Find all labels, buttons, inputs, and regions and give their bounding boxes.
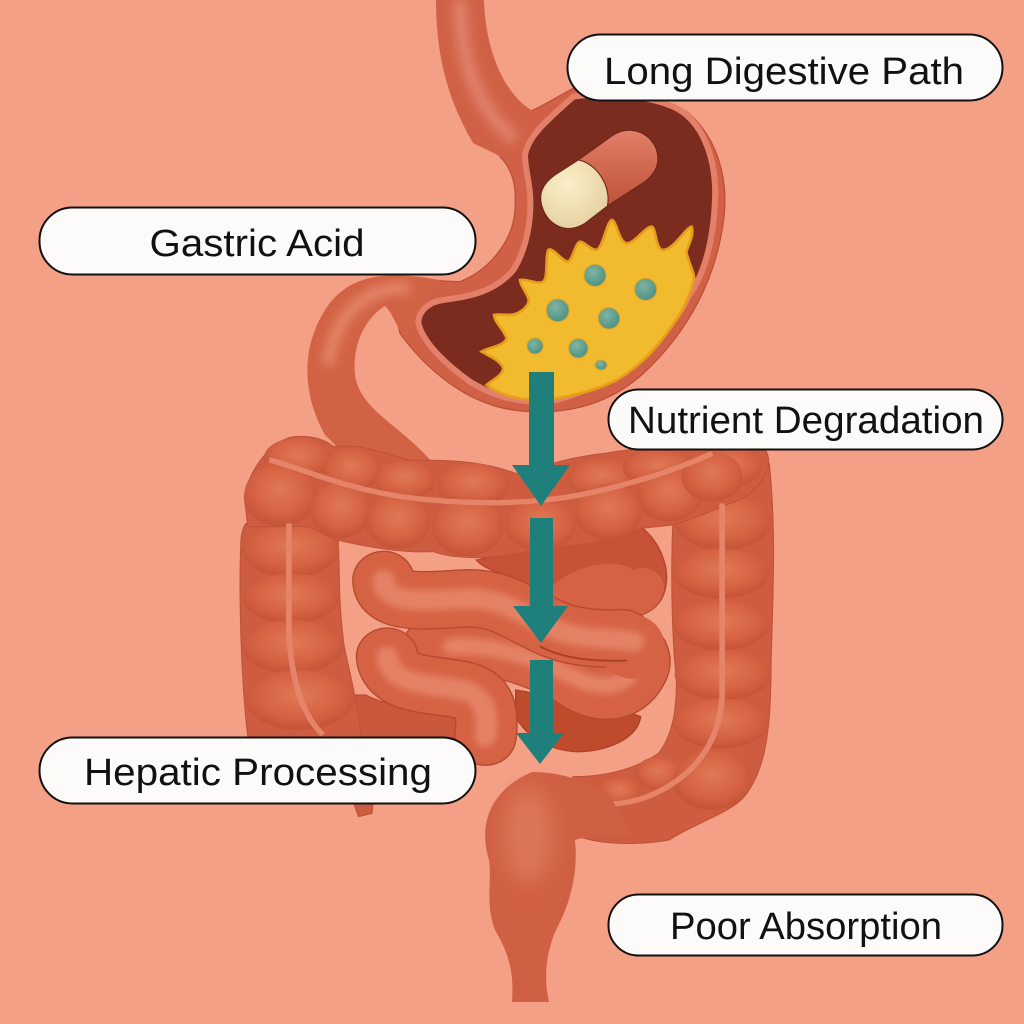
small intestine and colon [240,436,774,843]
label: Nutrient Degradation [608,390,1002,450]
ascending colon [240,523,373,817]
transverse colon [244,436,769,558]
esophagus [436,0,535,170]
label: Gastric Acid: Gastric Acid [150,223,364,265]
label: Hepatic Processing [40,738,476,804]
label: Long Digestive Path: Long Digestive Path [604,51,964,93]
small intestine: loops [384,580,665,737]
colon muscle bands [269,453,722,804]
small intestine: tail loop [353,695,487,763]
sigmoid highlight [504,787,552,883]
food mass with nutrients [482,220,694,400]
nutrient particles [527,264,657,370]
label: Hepatic Processing: Hepatic Processing [84,752,432,794]
rectum and sigmoid [485,772,630,1002]
stomach [307,0,725,462]
arrow 2 [513,518,568,643]
arrow 3 [516,660,564,764]
stomach inner lining [418,94,715,402]
label: Long Digestive Path [568,34,1002,100]
arrow 1 [512,372,570,506]
label: Poor Absorption [608,894,1002,956]
label: Poor Absorption: Poor Absorption [670,906,942,948]
stomach outer wall [390,87,725,412]
small intestine: back loops [516,690,641,752]
label: Gastric Acid [40,208,476,274]
illustration: digestive tract [240,0,774,1002]
duodenum [307,275,440,462]
descending colon [569,463,774,843]
label: Nutrient Degradation: Nutrient Degradation [628,400,984,442]
capsule [541,130,658,228]
